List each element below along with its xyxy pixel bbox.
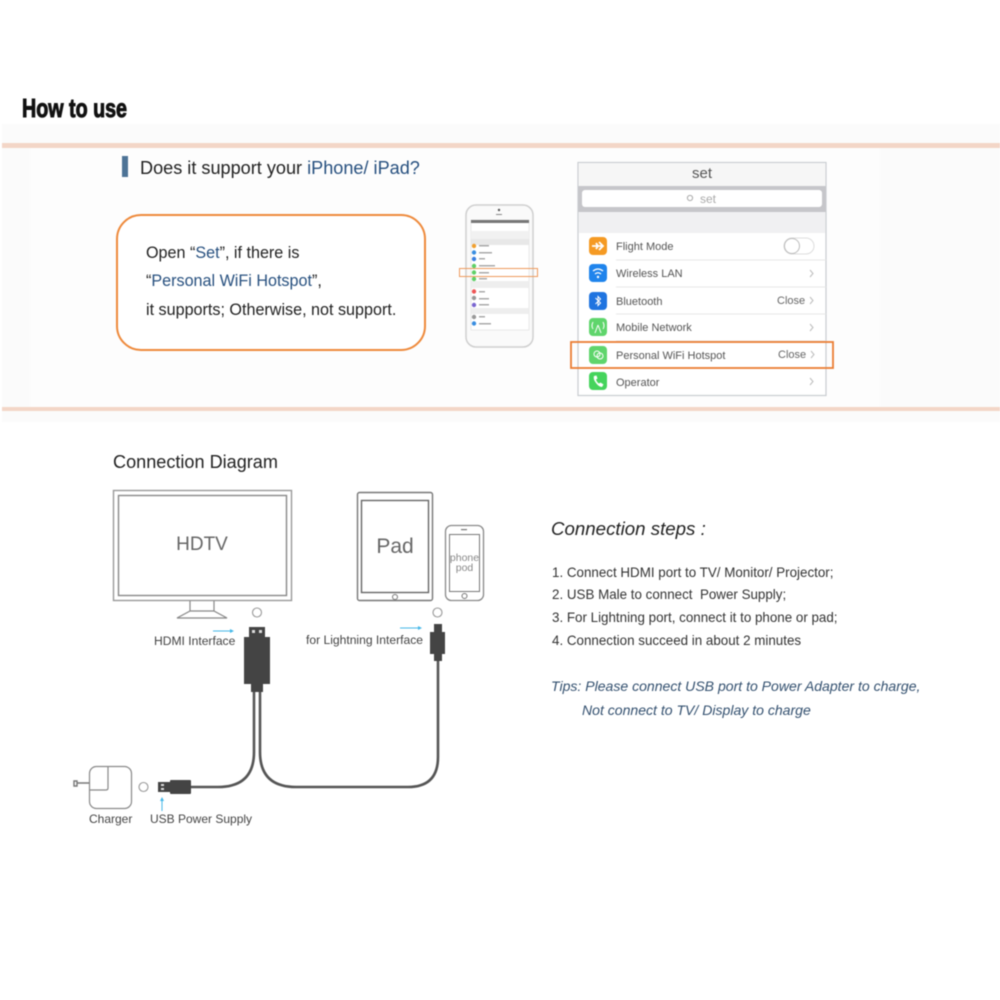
label: HDMI interface: HDMI Interface — [154, 634, 236, 648]
icon: pad — [358, 492, 432, 600]
icon: phone: pod — [456, 562, 473, 574]
row: bluetooth — [589, 292, 813, 310]
row: personal wifi hotspot: Personal WiFi Hotspot — [616, 350, 725, 362]
title: How to use — [22, 93, 127, 123]
icon: charger — [74, 766, 132, 808]
connector: USB — [158, 780, 191, 794]
text: tips: Not connect to TV/ Display to charge — [582, 702, 811, 718]
callout: personal wifi hotspot: it supports; Otherwise, not support. — [146, 301, 396, 319]
row: operator: Operator — [616, 377, 660, 389]
icon: HDTV: HDTV — [176, 534, 228, 555]
row: wireless lan: Wireless LAN — [616, 268, 683, 280]
heading: connection diagram: Connection Diagram — [113, 452, 278, 472]
icon: pad: Pad — [376, 535, 414, 558]
text: steps — [552, 565, 838, 648]
icon: phone settings thumbnail — [460, 205, 538, 347]
row: flight mode: Flight Mode — [616, 241, 673, 253]
cable — [190, 658, 438, 787]
highlight box: hotspot row — [571, 342, 833, 368]
panel: settings screen: set — [692, 165, 713, 182]
text: steps: 1. Connect HDMI port to TV/ Monitor/ Projector; — [552, 565, 833, 580]
label: lightning interface: for Lightning Interface — [306, 633, 423, 647]
arrow: lightning — [400, 626, 422, 630]
panel: settings screen: set — [700, 192, 717, 206]
arrow: HDMI — [213, 629, 234, 633]
text: tips: Tips: Please connect USB port to Power Adapter to charge, — [551, 678, 920, 694]
row: mobile network: Mobile Network — [616, 322, 692, 334]
row: bluetooth: Close — [777, 295, 805, 307]
heading: does it support: Does it support your iPhone/ iPad? — [140, 158, 420, 178]
text: steps: 4. Connection succeed in about 2 minutes — [552, 633, 801, 648]
icon: phone: phone — [450, 552, 479, 564]
marker circles — [139, 608, 442, 792]
callout: personal wifi hotspot: “Personal WiFi Hotspot”, — [146, 272, 322, 290]
icon: phone — [446, 526, 484, 600]
label: USB power supply: USB Power Supply — [150, 812, 252, 826]
row: personal wifi hotspot — [589, 346, 814, 364]
row: flight mode — [589, 237, 814, 255]
row: operator — [589, 372, 813, 390]
callout: personal wifi hotspot: Open “Set”, if there is — [146, 244, 299, 262]
panel: settings screen — [578, 162, 826, 396]
text: steps: 2. USB Male to connect Power Supply; — [552, 587, 786, 602]
arrow: USB — [160, 797, 164, 811]
text: tips — [551, 678, 920, 718]
text: steps: 3. For Lightning port, connect it to phone or pad; — [552, 610, 838, 625]
row: wireless lan — [589, 264, 813, 282]
row: personal wifi hotspot: Close — [778, 349, 806, 361]
connector: HDMI — [244, 627, 270, 692]
icon: HDTV — [114, 490, 292, 618]
label: charger: Charger — [89, 812, 132, 826]
heading: connection steps: Connection steps : — [551, 518, 706, 539]
panel: how to use background — [2, 124, 1000, 422]
row: mobile network — [589, 318, 813, 336]
callout: personal wifi hotspot — [117, 215, 425, 350]
connector: lightning — [430, 624, 445, 661]
row: bluetooth: Bluetooth — [616, 296, 662, 308]
